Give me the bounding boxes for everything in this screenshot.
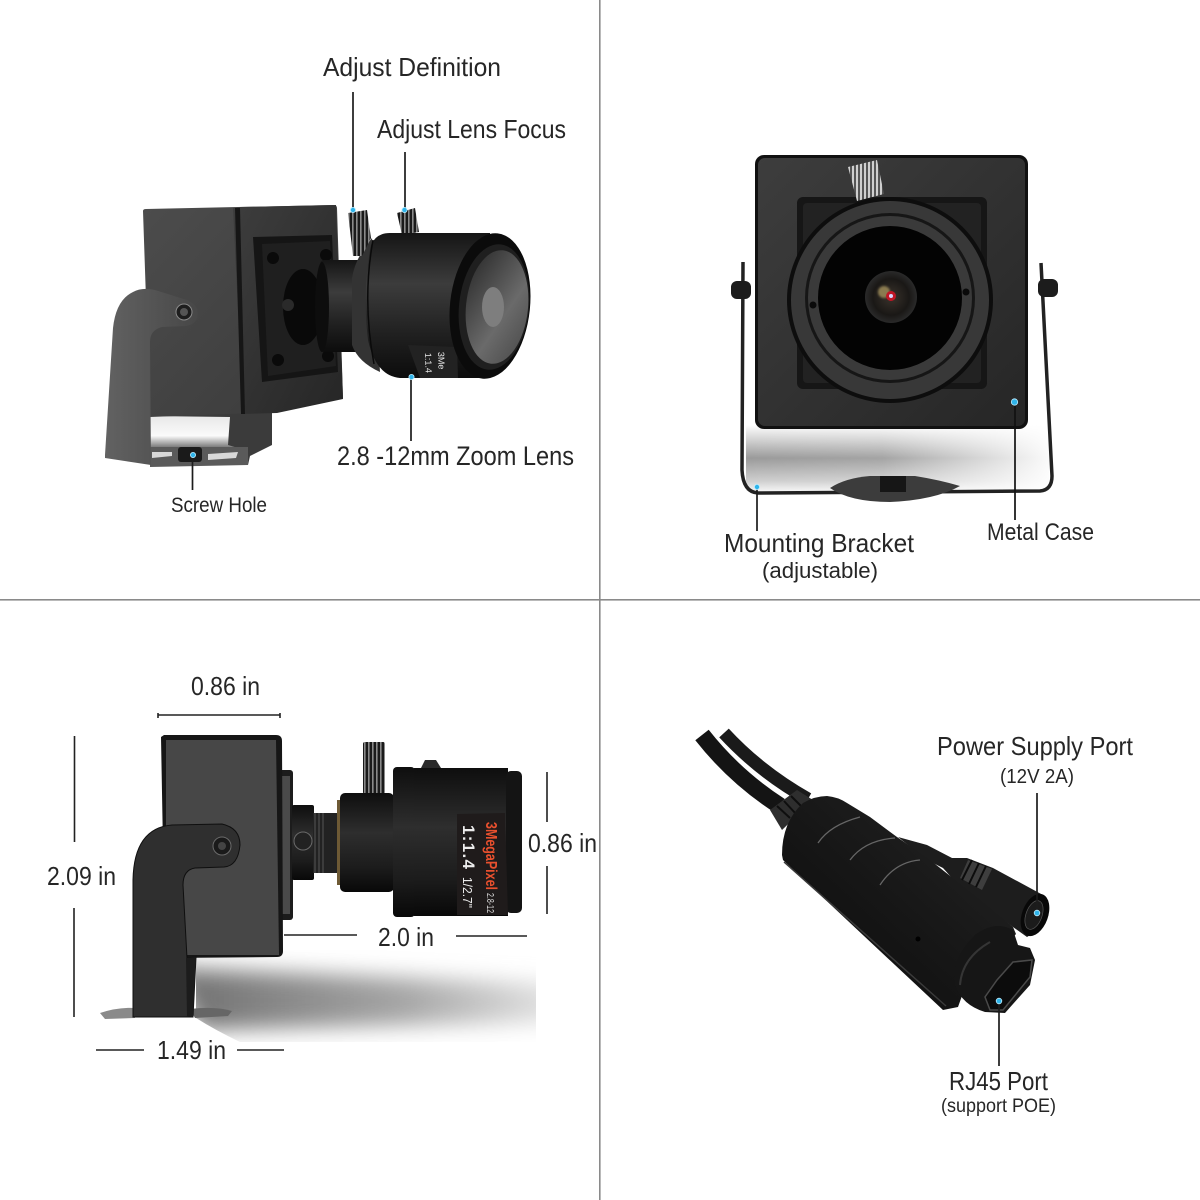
shadow under camera	[170, 968, 560, 1030]
callout: power supply port: (12V 2A)	[1000, 766, 1074, 788]
panel: camera three-quarter view	[105, 52, 574, 517]
callout: rj45 port	[941, 998, 1056, 1117]
knob adjust focus	[397, 208, 419, 235]
lens label	[457, 813, 508, 915]
lens centre	[865, 271, 917, 323]
callout: metal case	[987, 399, 1094, 546]
metal bracket back plate	[746, 425, 1049, 491]
dimension: case width top: 0.86 in	[191, 671, 260, 701]
cables	[702, 735, 780, 806]
power connector	[898, 837, 1048, 937]
knob adjust definition	[348, 210, 371, 256]
bracket screw	[213, 837, 231, 855]
camera illustration side	[100, 735, 522, 1019]
rear tab	[279, 770, 293, 920]
rj45 socket	[985, 960, 1032, 1010]
lens rings	[787, 197, 993, 403]
rj45 head	[954, 926, 1035, 1013]
dimension: base: 1.49 in	[157, 1035, 226, 1065]
callout: metal case: Metal Case	[987, 519, 1094, 546]
case	[161, 735, 283, 958]
camera illustration front	[731, 155, 1058, 502]
callout: screw hole	[171, 452, 267, 517]
panel: dimensions side view	[47, 671, 597, 1065]
callout: adjust lens focus	[377, 114, 566, 213]
bracket screw	[176, 304, 192, 320]
bracket	[105, 289, 198, 465]
sensor size text: 1/2.7"	[460, 877, 475, 908]
first barrel	[340, 793, 394, 892]
dimension: length: 2.0 in	[378, 922, 434, 952]
dimension: case width top	[158, 671, 280, 718]
case	[755, 155, 1028, 429]
neck	[292, 805, 314, 880]
f-number text: 1:1.4	[459, 825, 478, 870]
strain relief	[770, 790, 813, 830]
label text lens: 3Me	[436, 352, 447, 370]
case	[143, 205, 343, 417]
focal text: 2.8-12	[484, 893, 495, 913]
base flange	[830, 476, 960, 502]
main body	[782, 796, 1016, 1010]
dimension: lens diameter: 0.86 in	[528, 828, 597, 858]
base flange	[100, 1008, 135, 1019]
under-bracket metal	[150, 412, 272, 465]
callout: mounting bracket: Mounting Bracket	[724, 528, 915, 558]
camera illustration angled	[105, 205, 537, 467]
barrel	[366, 233, 490, 378]
lens label plate	[408, 345, 458, 378]
bracket	[133, 824, 240, 1017]
callout: screw hole: Screw Hole	[171, 494, 267, 517]
lens mount	[283, 269, 323, 345]
main lens barrel	[393, 767, 415, 917]
callout: power supply port: Power Supply Port	[937, 731, 1134, 761]
callout: mounting bracket	[724, 484, 915, 583]
ring	[352, 238, 380, 372]
callout: adjust definition: Adjust Definition	[323, 52, 501, 82]
knob	[848, 160, 884, 201]
cable assembly illustration	[702, 733, 1055, 1013]
bracket wire	[742, 262, 1052, 493]
camera illustration angled: 1:1.4	[423, 353, 434, 373]
dimension: height: 2.09 in	[47, 861, 116, 891]
callout: zoom lens: 2.8 -12mm Zoom Lens	[337, 441, 574, 471]
callout: rj45 port: RJ45 Port	[949, 1066, 1049, 1096]
red model text: 3MegaPixel	[482, 822, 499, 890]
callout: adjust definition	[323, 52, 501, 213]
panel: camera front view	[724, 155, 1094, 583]
callout: rj45 port: (support POE)	[941, 1096, 1056, 1117]
callout: zoom lens	[337, 374, 574, 471]
knob	[363, 742, 385, 794]
front of lens	[443, 229, 537, 383]
callout: mounting bracket: (adjustable)	[762, 558, 878, 583]
bracket screws	[731, 281, 751, 299]
panel: cable ports	[702, 731, 1134, 1117]
inner square	[797, 197, 987, 389]
mounting square	[253, 235, 338, 382]
callout: power supply port	[937, 731, 1134, 916]
neck	[320, 260, 364, 352]
callout: adjust lens focus: Adjust Lens Focus	[377, 114, 566, 144]
